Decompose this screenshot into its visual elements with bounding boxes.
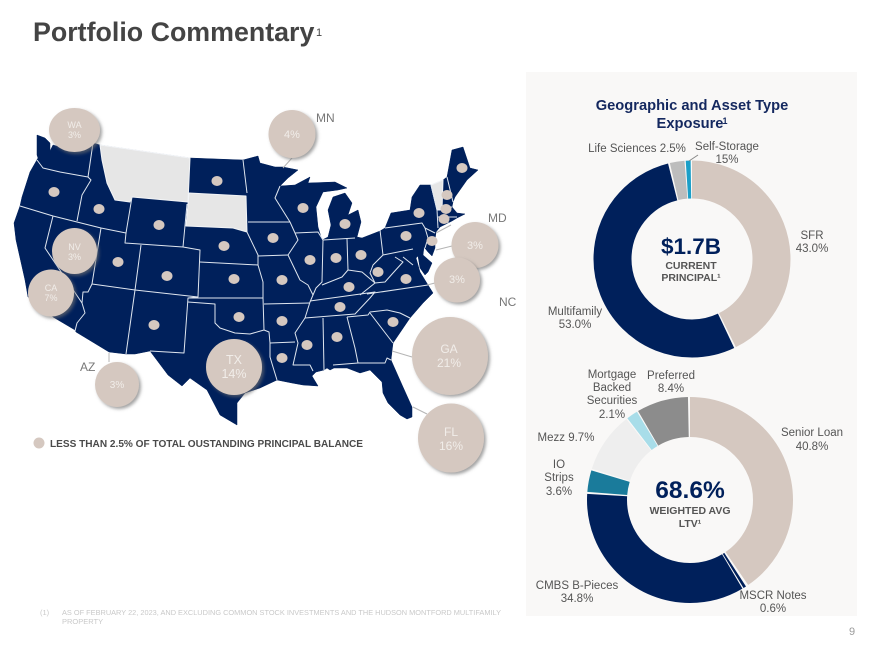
bubble: WA: 3% bbox=[68, 130, 81, 140]
leader lines bbox=[109, 158, 452, 414]
donut labels: investment type: 3.6% bbox=[546, 486, 572, 498]
bubble: WA bbox=[49, 108, 100, 152]
donut labels: asset type bbox=[548, 141, 828, 331]
legend: LESS THAN 2.5% OF TOTAL OUSTANDING PRINCIPAL BALANCE bbox=[50, 439, 363, 450]
bubble: NV: NV bbox=[68, 242, 81, 252]
donut labels: investment type: Mortgage bbox=[588, 369, 636, 381]
donut labels: investment type: CMBS B-Pieces bbox=[536, 580, 618, 592]
donut labels: asset type: 43.0% bbox=[796, 243, 828, 255]
donut labels: asset type: Multifamily bbox=[548, 306, 602, 318]
bubble: MN bbox=[268, 110, 316, 158]
title: Portfolio Commentary bbox=[33, 17, 314, 47]
donut center: current principal bbox=[661, 234, 721, 284]
donut labels: investment type: Strips bbox=[544, 472, 574, 484]
state markers under 2.5% bbox=[48, 163, 468, 363]
donut labels: asset type: SFR bbox=[800, 230, 824, 242]
bubble: NC bbox=[434, 258, 480, 302]
bubble: TX: 14% bbox=[221, 367, 247, 381]
panel heading: 1 bbox=[722, 116, 728, 126]
state labels: MD bbox=[488, 211, 507, 225]
donut chart: investment type bbox=[607, 417, 773, 583]
bubble: AZ: 3% bbox=[110, 380, 124, 391]
title: 1 bbox=[316, 27, 322, 39]
donut center: current principal: $1.7B bbox=[661, 234, 721, 259]
donut labels: asset type: Life Sciences 2.5% bbox=[588, 143, 686, 155]
donut labels: investment type: 8.4% bbox=[658, 383, 684, 395]
donut labels: asset type: 53.0% bbox=[559, 319, 591, 331]
bubble: MN: 4% bbox=[284, 129, 300, 141]
state labels: AZ bbox=[80, 360, 95, 374]
panel: exposure background bbox=[526, 72, 857, 616]
bubble: FL bbox=[418, 404, 484, 472]
donut labels: investment type: 40.8% bbox=[796, 441, 828, 453]
bubble: NC: 3% bbox=[449, 274, 465, 286]
bubble: WA: WA bbox=[67, 120, 82, 130]
bubble: TX bbox=[206, 339, 262, 395]
footnote: PROPERTY bbox=[62, 617, 103, 626]
donut center: current principal: CURRENT bbox=[665, 260, 717, 272]
bubble: CA bbox=[28, 270, 74, 316]
map: United States by state bbox=[14, 135, 478, 425]
donut chart: asset type bbox=[612, 180, 772, 338]
bubble: MD: 3% bbox=[467, 240, 483, 252]
donut labels: investment type: MSCR Notes bbox=[739, 590, 807, 602]
donut labels: asset type: Self-Storage bbox=[695, 141, 759, 153]
donut labels: investment type: 0.6% bbox=[760, 603, 786, 615]
state: South Dakota (no exposure) bbox=[186, 193, 247, 232]
donut labels: investment type: Backed bbox=[593, 382, 631, 394]
bubble: FL: FL bbox=[444, 425, 458, 439]
donut labels: investment type: 34.8% bbox=[561, 593, 593, 605]
donut labels: investment type: Preferred bbox=[647, 370, 695, 382]
bubble: GA bbox=[412, 317, 488, 395]
panel heading: Geographic and Asset Type bbox=[596, 98, 788, 114]
state: Vermont (no exposure) bbox=[431, 180, 443, 210]
donut center: current principal: PRINCIPAL¹ bbox=[661, 272, 721, 284]
page number: 9 bbox=[849, 626, 855, 638]
bubble: NV bbox=[52, 228, 97, 274]
bubble: GA: 21% bbox=[437, 356, 461, 370]
donut labels: asset type: 15% bbox=[715, 154, 739, 166]
bubble: MD bbox=[452, 222, 498, 268]
bubble: CA: CA bbox=[45, 283, 57, 293]
footnote: (1) bbox=[40, 608, 50, 617]
state: Montana (no exposure) bbox=[100, 145, 190, 202]
donut center: weighted average LTV: WEIGHTED AVG bbox=[649, 505, 731, 517]
state labels: NC bbox=[499, 295, 517, 309]
donut center: weighted average LTV: 68.6% bbox=[655, 477, 725, 504]
donut center: weighted average LTV: LTV¹ bbox=[679, 518, 702, 530]
donut labels: investment type: 2.1% bbox=[599, 409, 625, 421]
state labels bbox=[80, 111, 517, 374]
donut labels: investment type: Securities bbox=[587, 395, 637, 407]
panel heading bbox=[596, 98, 788, 132]
donut labels: investment type: IO bbox=[553, 459, 565, 471]
state labels: MN bbox=[316, 111, 335, 125]
panel heading: Exposure bbox=[657, 116, 723, 132]
bubble: CA: 7% bbox=[44, 293, 58, 303]
state borders bbox=[20, 143, 457, 380]
donut center: weighted average LTV bbox=[649, 477, 731, 530]
bubble: GA: GA bbox=[440, 342, 458, 356]
donut labels: investment type: Mezz 9.7% bbox=[538, 432, 594, 444]
footnote: AS OF FEBRUARY 22, 2023, AND EXCLUDING COMMON STOCK INVESTMENTS AND THE HUDSON MONTFORD MULTIFAMILY bbox=[62, 608, 501, 617]
footnote bbox=[40, 608, 501, 626]
bubble: FL: 16% bbox=[439, 439, 463, 453]
leader: self-storage bbox=[689, 155, 698, 161]
bubble: NV: 3% bbox=[68, 252, 81, 262]
donut labels: investment type bbox=[536, 369, 843, 615]
bubble: TX: TX bbox=[226, 353, 243, 367]
donut labels: investment type: Senior Loan bbox=[781, 427, 843, 439]
bubble: AZ bbox=[95, 362, 139, 407]
